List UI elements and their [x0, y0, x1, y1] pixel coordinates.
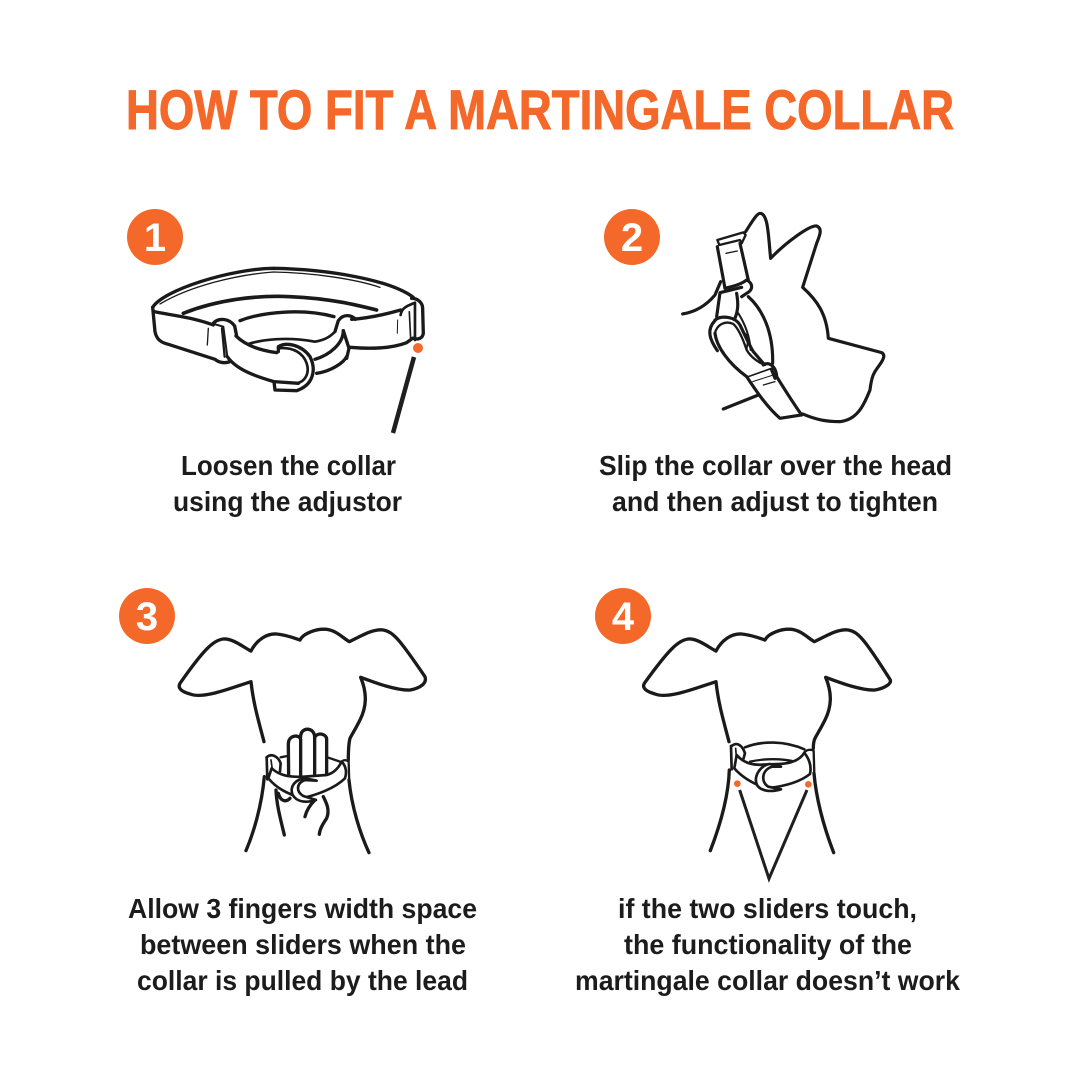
- step 2 caption: Slip the collar over the head: [599, 450, 952, 481]
- step 3 caption: between sliders when the: [140, 929, 466, 960]
- hand with three fingers: [276, 729, 328, 835]
- step 4 caption: the functionality of the: [624, 929, 912, 960]
- collar and sliders: [267, 755, 349, 802]
- panel: step 1: [127, 209, 423, 517]
- step 1 number badge: [127, 209, 183, 265]
- step 3 caption: collar is pulled by the lead: [137, 965, 468, 996]
- step 2 caption: [599, 450, 952, 517]
- dog head and neck outline: [179, 629, 425, 853]
- panel: step 3: [119, 588, 477, 996]
- illustration: martingale collar with loosened adjustor: [153, 268, 423, 391]
- step 4 caption: martingale collar doesn’t work: [575, 965, 961, 996]
- step 1 caption: using the adjustor: [173, 486, 402, 517]
- dog head and neck outline: [644, 629, 890, 853]
- illustration: collar on dog head in profile: [683, 213, 884, 422]
- callout: two orange dots and V pointer lines: [734, 780, 812, 879]
- step 3 number badge: [119, 588, 175, 644]
- step 1 caption: Loosen the collar: [181, 450, 396, 481]
- step 3 caption: [128, 893, 477, 996]
- step 2 number badge: 2: [621, 216, 643, 260]
- step 3 number badge: 3: [136, 595, 158, 639]
- step 1 caption: [173, 450, 402, 517]
- collar with touching sliders: [731, 743, 814, 791]
- callout arrow: adjustor pointer: [393, 343, 423, 433]
- step 2 number badge: [604, 209, 660, 265]
- step 3 caption: Allow 3 fingers width space: [128, 893, 477, 924]
- step 4 number badge: 4: [612, 595, 635, 639]
- illustration: three fingers between sliders: [179, 629, 425, 853]
- illustration: sliders touching on dog neck: [644, 629, 890, 879]
- panel: step 2: [599, 209, 952, 517]
- step 4 number badge: [595, 588, 651, 644]
- step 1 number badge: 1: [144, 216, 166, 260]
- panel: step 4: [575, 588, 961, 996]
- step 4 caption: if the two sliders touch,: [618, 893, 917, 924]
- step 2 caption: and then adjust to tighten: [612, 486, 938, 517]
- step 4 caption: [575, 893, 961, 996]
